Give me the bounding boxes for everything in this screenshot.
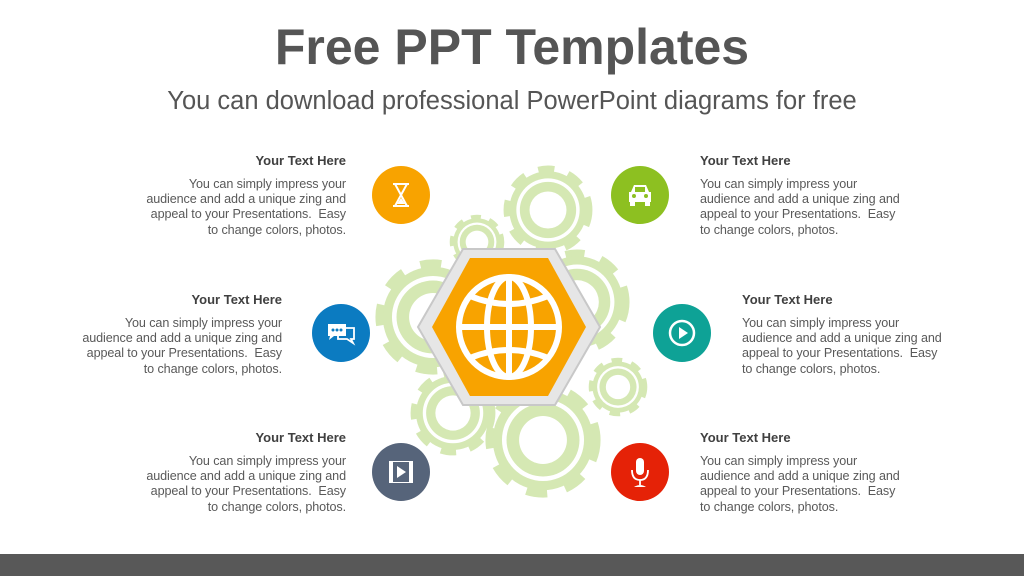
text block: top left [146, 153, 346, 237]
icon: video [372, 443, 430, 501]
text block: bottom right: Your Text Here [700, 430, 791, 445]
text block: middle left: You can simply impress your [125, 316, 282, 330]
text block: middle right: audience and add a unique zing and [742, 331, 942, 345]
text block: top left: to change colors, photos. [208, 223, 346, 237]
text block: top right: You can simply impress your [700, 177, 857, 191]
text block: middle left [82, 292, 282, 376]
text block: middle right: Your Text Here [742, 292, 833, 307]
text block: top right [700, 153, 900, 237]
text block: top left: appeal to your Presentations. Easy [151, 207, 346, 221]
text block: middle right: You can simply impress your [742, 316, 899, 330]
text block: top right: audience and add a unique zing and [700, 192, 900, 206]
text block: bottom left: You can simply impress your [189, 454, 346, 468]
text block: top right: to change colors, photos. [700, 223, 838, 237]
text block: middle right: to change colors, photos. [742, 362, 880, 376]
text block: top right: Your Text Here [700, 153, 791, 168]
central hexagon with globe [418, 249, 600, 405]
footer bar [0, 554, 1024, 576]
icon: microphone [611, 443, 669, 501]
text block: middle left: to change colors, photos. [144, 362, 282, 376]
text block: bottom right: to change colors, photos. [700, 500, 838, 514]
subtitle: You can download professional PowerPoint diagrams for free [167, 87, 857, 115]
text block: top left: You can simply impress your [189, 177, 346, 191]
text block: middle right [742, 292, 942, 376]
text block: top left: Your Text Here [255, 153, 346, 168]
text block: bottom left: audience and add a unique zing and [146, 469, 346, 483]
text block: middle left: appeal to your Presentations. Easy [87, 346, 282, 360]
icon: hourglass [372, 166, 430, 224]
text block: bottom left [146, 430, 346, 514]
icon: chat [312, 304, 370, 362]
text block: bottom left: appeal to your Presentations. Easy [151, 484, 346, 498]
text block: bottom right [700, 430, 900, 514]
icon: play [653, 304, 711, 362]
text block: bottom right: audience and add a unique zing and [700, 469, 900, 483]
text block: top left: audience and add a unique zing and [146, 192, 346, 206]
text block: middle left: Your Text Here [191, 292, 282, 307]
text block: bottom left: Your Text Here [255, 430, 346, 445]
text block: bottom right: You can simply impress your [700, 454, 857, 468]
text block: top right: appeal to your Presentations. Easy [700, 207, 895, 221]
text block: middle right: appeal to your Presentations. Easy [742, 346, 937, 360]
title: Free PPT Templates [275, 19, 749, 75]
text block: middle left: audience and add a unique zing and [82, 331, 282, 345]
text block: bottom right: appeal to your Presentations. Easy [700, 484, 895, 498]
text block: bottom left: to change colors, photos. [208, 500, 346, 514]
icon: car [611, 166, 669, 224]
gear cluster [383, 171, 644, 490]
